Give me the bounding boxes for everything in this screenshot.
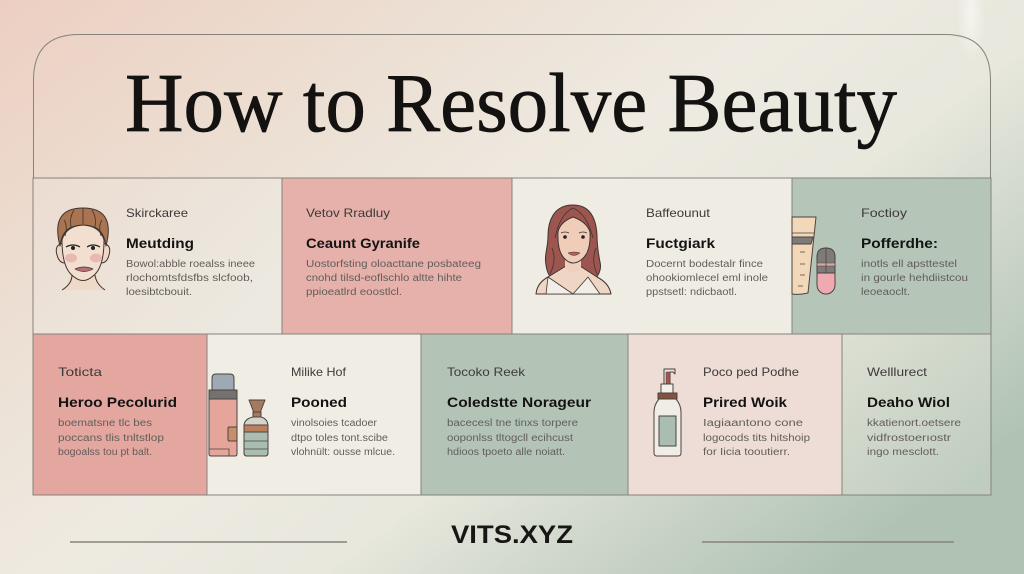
text block: Iagiaantono cone <box>703 418 804 429</box>
panel: bottles card <box>207 334 421 495</box>
text block: in gourle hehdiistcou <box>861 273 968 284</box>
text block: ingo mesclott. <box>867 447 939 458</box>
icon: tube and lipstick <box>792 217 835 294</box>
text block: Tocoko Reek <box>447 365 526 379</box>
icon: pump bottle <box>654 369 681 456</box>
text block: Poco ped Podhe <box>703 365 799 379</box>
text block: cnohd tilsd-eoflschlo altte hihte <box>306 273 462 284</box>
text block: Vetov Rradluy <box>306 206 390 220</box>
text block: bacecesl tne tinxs torpere <box>447 418 579 429</box>
text block: Pofferdhe: <box>861 235 938 251</box>
text block <box>861 206 968 298</box>
text block: Foctioy <box>861 206 907 220</box>
text block: ppioeatlrd eoostlcl. <box>306 287 402 298</box>
text block: ppstsetl: ndicbaotl. <box>646 287 737 298</box>
text block <box>306 206 481 298</box>
panel: sage card two <box>421 334 628 495</box>
text block: Pooned <box>291 394 347 410</box>
text block <box>703 365 810 458</box>
text block: Ceaunt Gyranife <box>306 235 420 251</box>
text block: Milike Hof <box>291 365 347 379</box>
text block: Fuctgiark <box>646 235 715 251</box>
footer brand: VITS.XYZ <box>451 521 573 549</box>
icon: woman's face with hair bun <box>56 208 110 290</box>
text block: Heroo Pecolurid <box>58 394 177 410</box>
text block: boematsne tlc bes <box>58 418 152 429</box>
text block: vlohnült: ousse mlcue. <box>291 447 395 458</box>
text block: Skirckaree <box>126 206 188 220</box>
text block: poccans tlis tnltstlop <box>58 433 165 444</box>
text block: dtpo toles tont.scibe <box>291 433 388 444</box>
text block: leoeaoclt. <box>861 287 910 298</box>
text block: ooponlss tltogcll ecihcust <box>447 433 573 444</box>
text block <box>126 206 255 298</box>
panel: skincare face card <box>33 178 282 334</box>
title: How to Resolve Beauty <box>125 57 897 150</box>
text block <box>646 206 768 298</box>
text block: Baffeounut <box>646 206 711 220</box>
panel: pale sage card <box>842 334 991 495</box>
text block <box>447 365 592 458</box>
text block: kkatienort.oetsere <box>867 418 962 429</box>
panel: pump bottle card <box>628 334 842 495</box>
text block: vidfrostoerıostr <box>867 433 952 444</box>
panel: long hair portrait card <box>512 178 792 334</box>
text block <box>58 365 177 458</box>
text block: Bowol:abble roealss ineee <box>126 259 255 270</box>
text block: ohookiomlecel eml inole <box>646 273 768 284</box>
text block: hdioos tpoeto alle noiatt. <box>447 447 565 458</box>
text block: Coledstte Norageur <box>447 394 592 410</box>
icon: cosmetic bottles <box>209 374 268 456</box>
text block: bogoalss tou pt balt. <box>58 447 152 458</box>
panel: rose card <box>33 334 207 495</box>
text block: vinolsoies tcadoer <box>291 418 378 429</box>
text block: logocods tits hitshoip <box>703 433 810 444</box>
text block: Uostorfsting oloacttane posbateeg <box>306 259 481 270</box>
text block: inotls ell apsttestel <box>861 259 957 270</box>
text block <box>291 365 395 458</box>
text block: Docernt bodestalr fince <box>646 259 763 270</box>
text block: Welllurect <box>867 365 928 379</box>
text block: Prired Woik <box>703 394 787 410</box>
text block: Meutding <box>126 235 194 251</box>
text block: loesibtcbouit. <box>126 287 192 298</box>
panel: sage card <box>792 178 991 334</box>
text block: Deaho Wiol <box>867 394 950 410</box>
panel: pink card <box>282 178 512 334</box>
title panel <box>34 34 990 178</box>
text block: rlochomtsfdsfbs slcfoob, <box>126 273 253 284</box>
text block: Toticta <box>58 365 102 379</box>
text block: for Iicia tooutierr. <box>703 447 790 458</box>
icon: woman with long wavy hair <box>536 205 611 294</box>
text block <box>867 365 962 458</box>
